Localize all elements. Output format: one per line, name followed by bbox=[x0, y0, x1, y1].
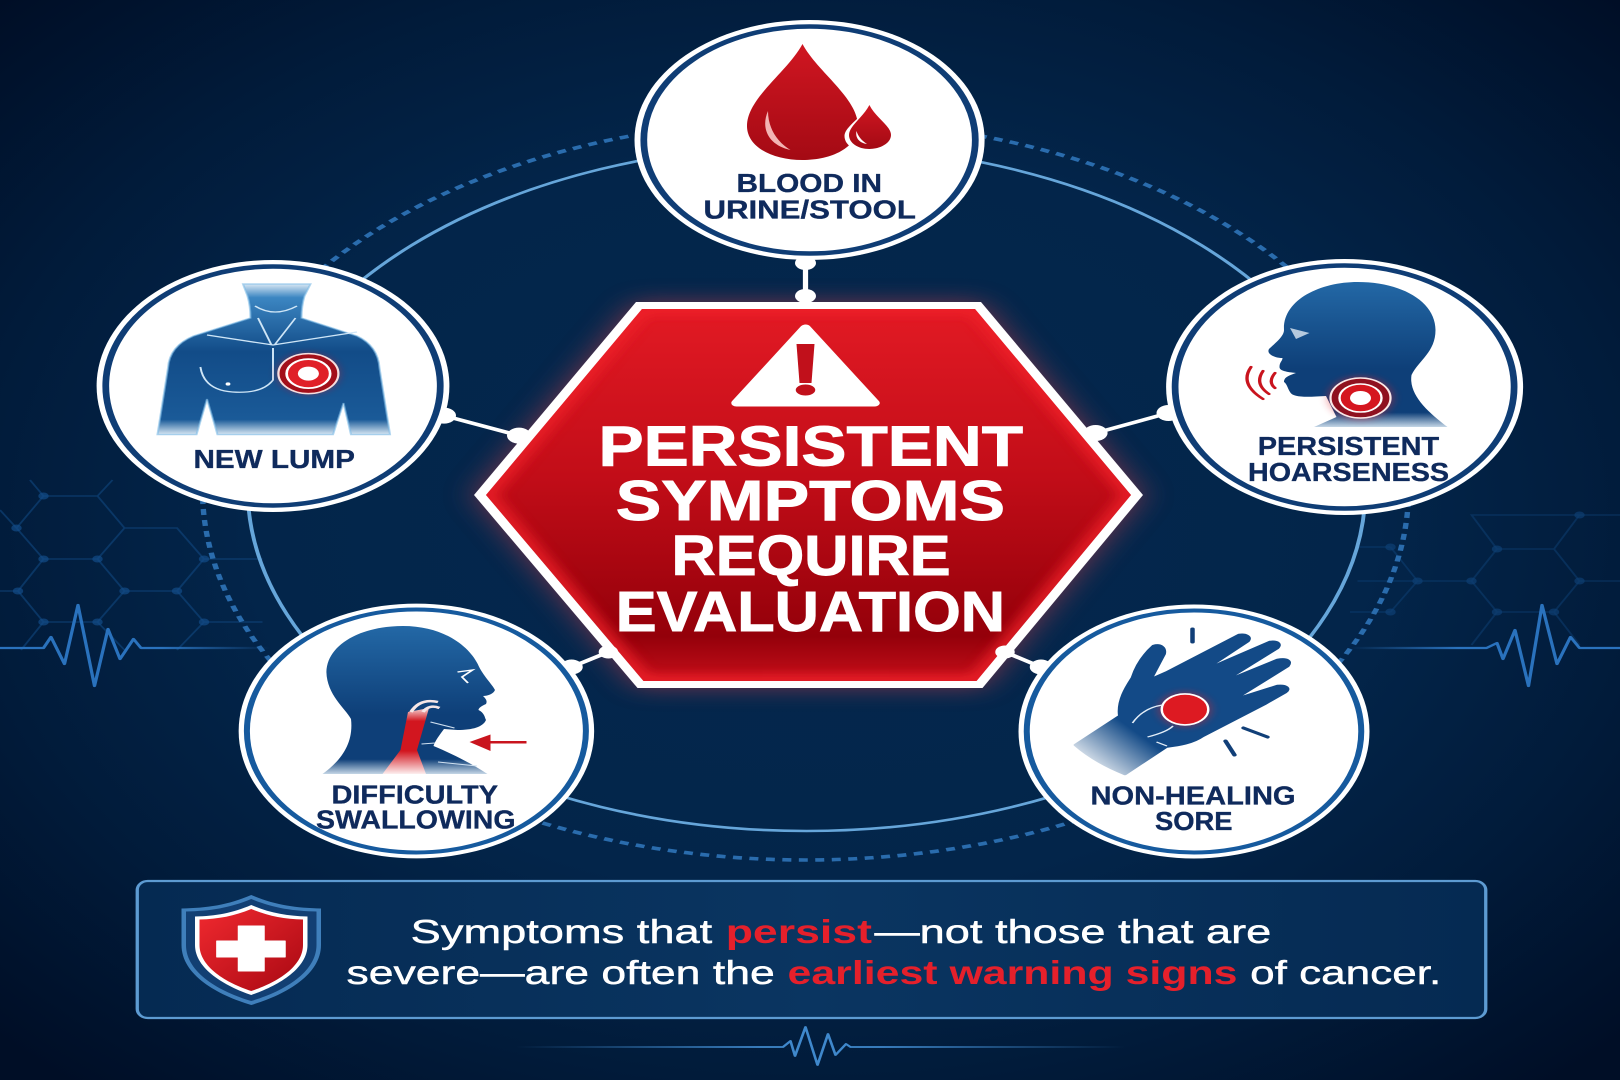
badge: new lump bbox=[97, 260, 449, 512]
warning triangle icon bbox=[736, 328, 874, 403]
panel: key message bbox=[137, 881, 1486, 1018]
icon: medical shield bbox=[182, 895, 321, 1005]
label: PERSISTENT bbox=[1258, 432, 1439, 461]
label: HOARSENESS bbox=[1248, 458, 1449, 487]
icon: sound waves bbox=[1247, 367, 1275, 399]
callout text: of cancer. bbox=[1250, 954, 1441, 992]
icon: head profile with throat target bbox=[1247, 282, 1448, 427]
heartbeat line bottom bbox=[516, 1027, 1125, 1065]
badge: difficulty swallowing bbox=[239, 604, 594, 858]
icon: pain rays bbox=[1192, 629, 1268, 755]
connector: left bbox=[432, 408, 531, 444]
background hexagon network right bbox=[1350, 512, 1620, 645]
label bbox=[316, 781, 516, 835]
headline: REQUIRE bbox=[672, 524, 951, 588]
connector: bottom right bbox=[995, 646, 1052, 674]
solid inner orbit bbox=[248, 145, 1365, 831]
badge: blood in urine/stool bbox=[634, 20, 985, 260]
badge: persistent hoarseness bbox=[1166, 259, 1523, 515]
label: NEW LUMP bbox=[194, 445, 355, 474]
callout text: persist bbox=[726, 913, 872, 951]
label: DIFFICULTY bbox=[332, 781, 498, 810]
icon: red arrow bbox=[470, 734, 526, 751]
connector: bottom left bbox=[560, 646, 618, 674]
heartbeat line left bbox=[0, 605, 270, 686]
callout text: —not those that are bbox=[874, 913, 1271, 951]
headline bbox=[598, 415, 1023, 644]
callout text bbox=[346, 913, 1441, 992]
label: URINE/STOOL bbox=[704, 196, 916, 225]
badge: non-healing sore bbox=[1018, 604, 1370, 858]
background hexagon network left bbox=[0, 480, 262, 650]
label bbox=[1090, 782, 1296, 836]
label: SORE bbox=[1155, 807, 1233, 836]
heartbeat line right bbox=[1350, 605, 1620, 686]
central warning hexagon bbox=[474, 302, 1143, 688]
dashed outer orbit bbox=[202, 120, 1408, 860]
connector: right bbox=[1084, 405, 1180, 441]
connector: top bbox=[795, 256, 816, 303]
callout text: severe—are often the bbox=[346, 954, 775, 992]
label bbox=[1248, 432, 1449, 487]
label: BLOOD IN bbox=[736, 169, 882, 198]
callout text: earliest warning signs bbox=[788, 954, 1238, 992]
headline: PERSISTENT bbox=[598, 415, 1023, 478]
icon: blood drops bbox=[747, 44, 894, 160]
icon: hand with sore bbox=[1076, 629, 1289, 774]
icon: head profile with throat bbox=[322, 626, 495, 774]
icon: chest with lump bbox=[158, 284, 390, 435]
label: NON-HEALING bbox=[1090, 782, 1296, 811]
callout text: Symptoms that bbox=[411, 913, 712, 951]
headline: SYMPTOMS bbox=[616, 469, 1005, 533]
headline: EVALUATION bbox=[616, 580, 1005, 644]
label: SWALLOWING bbox=[316, 806, 516, 835]
label bbox=[704, 169, 916, 225]
